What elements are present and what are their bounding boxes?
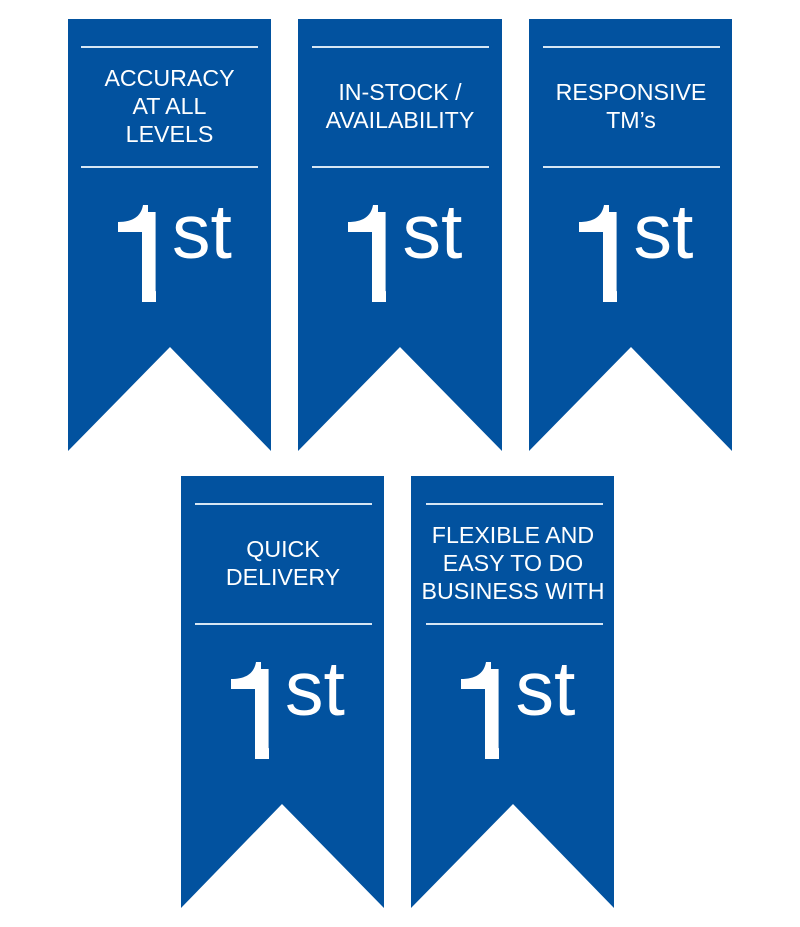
rank number bbox=[231, 662, 269, 759]
label: RESPONSIVE bbox=[556, 79, 706, 105]
rank suffix: st bbox=[285, 646, 345, 732]
label: EASY TO DO bbox=[443, 550, 583, 576]
label: DELIVERY bbox=[226, 564, 340, 590]
label: TM’s bbox=[606, 107, 656, 133]
label: IN-STOCK / bbox=[338, 79, 462, 105]
ribbon shape bbox=[529, 19, 732, 451]
ribbon shape bbox=[68, 19, 271, 451]
rank suffix: st bbox=[402, 189, 462, 275]
rank suffix: st bbox=[172, 189, 232, 275]
rank number: 1 bbox=[224, 643, 295, 787]
label: QUICK bbox=[246, 536, 320, 562]
ribbon: in-stock / availability bbox=[298, 19, 502, 451]
rank number bbox=[461, 662, 499, 759]
ribbon shape bbox=[298, 19, 502, 451]
rank number: 1 bbox=[454, 643, 525, 787]
rank number: 1 bbox=[572, 186, 643, 330]
rank number: 1 bbox=[110, 186, 182, 330]
ribbon shape bbox=[181, 476, 384, 908]
rank number: 1 bbox=[340, 186, 412, 330]
rank number bbox=[579, 205, 617, 302]
rank number bbox=[348, 205, 386, 302]
rank number bbox=[118, 205, 156, 302]
label: ACCURACY bbox=[104, 65, 235, 91]
label: FLEXIBLE AND bbox=[432, 522, 594, 548]
label: AVAILABILITY bbox=[326, 107, 474, 133]
ribbon shape bbox=[411, 476, 614, 908]
ribbon: responsive TMs bbox=[529, 19, 732, 451]
rank suffix: st bbox=[634, 189, 693, 275]
ribbon: accuracy at all levels bbox=[68, 19, 271, 451]
ribbon: flexible and easy to do business with bbox=[411, 476, 614, 908]
label: AT ALL bbox=[133, 93, 207, 119]
label: BUSINESS WITH bbox=[422, 578, 604, 604]
rank suffix: st bbox=[516, 646, 575, 732]
label: LEVELS bbox=[126, 121, 213, 147]
ribbon: quick delivery bbox=[181, 476, 384, 908]
